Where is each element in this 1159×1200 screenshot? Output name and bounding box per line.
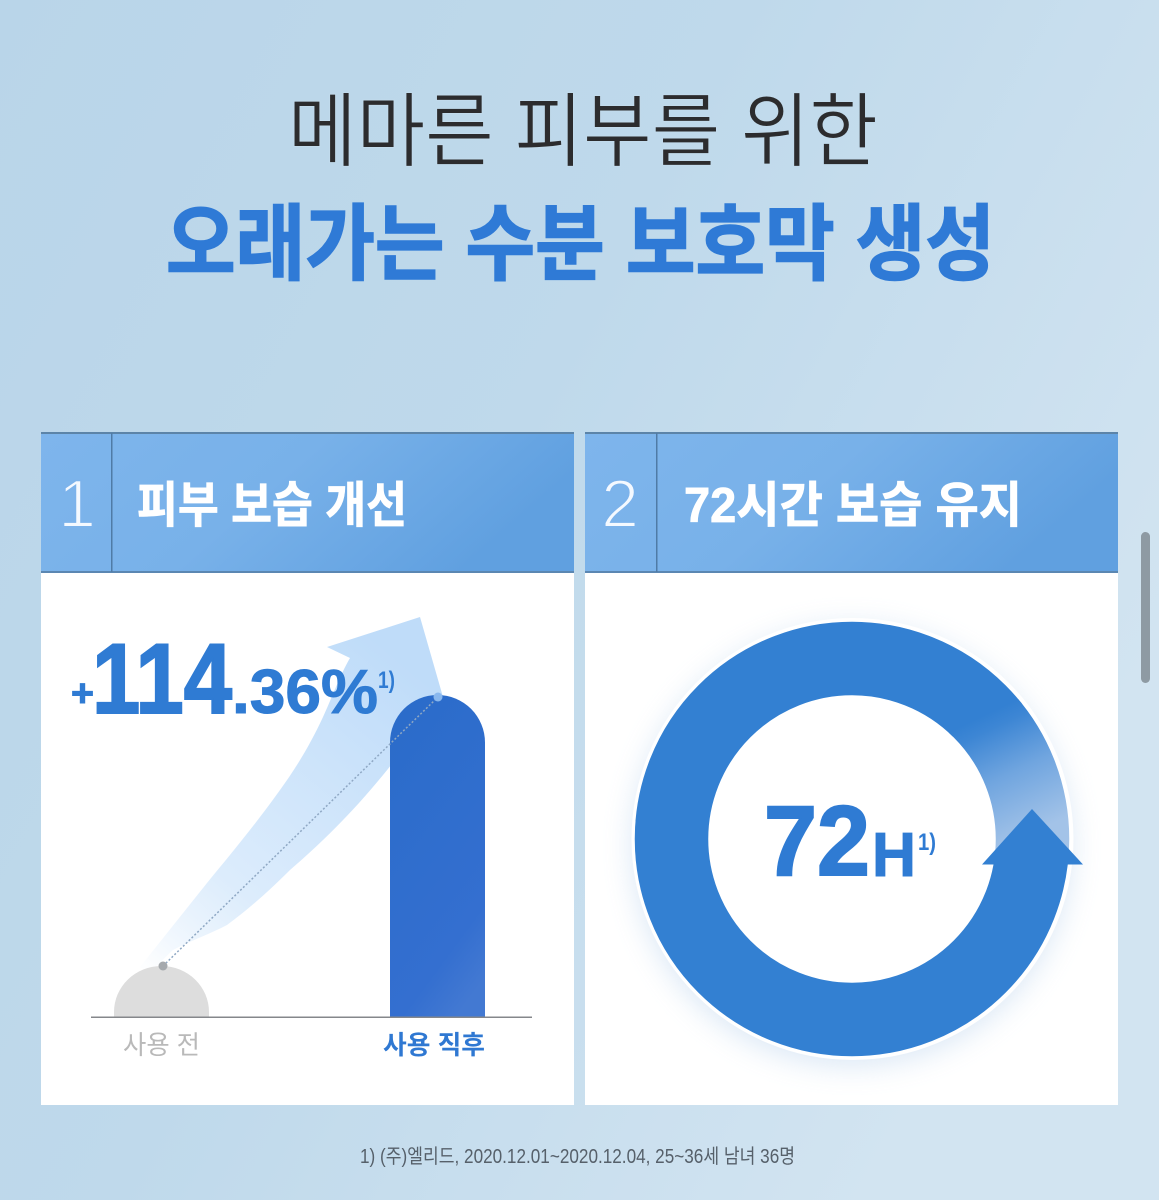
ring fade segment xyxy=(948,699,1070,850)
ring shadow xyxy=(632,626,1072,1066)
dotted trend line xyxy=(163,697,438,966)
ring label: 72H xyxy=(764,785,936,896)
panel header: 1 xyxy=(58,466,96,542)
panel body xyxy=(585,572,1118,1105)
stat: +114.36%: 1) xyxy=(378,667,395,694)
panel header: 2 xyxy=(601,466,639,542)
stat: +114.36%: .36% xyxy=(232,658,378,727)
ring label: 72H: H xyxy=(872,821,916,890)
trend end dot xyxy=(434,692,442,702)
stat: +114.36% xyxy=(71,623,395,734)
title: 메마른 피부를 위한 xyxy=(288,88,878,178)
after bar xyxy=(390,695,485,1017)
panel header: 피부 보습 개선 xyxy=(137,479,407,533)
swoosh arrow xyxy=(140,617,443,972)
trend start dot xyxy=(158,962,168,970)
title: 오래가는 수분 보호막 생성 xyxy=(166,198,995,291)
panel header xyxy=(41,432,574,573)
chart baseline xyxy=(91,1016,532,1018)
label: before use: 사용 전 xyxy=(123,1030,200,1060)
footnote: 1) (주)엘리드, 2020.12.01~2020.12.04, 25~36세 남녀 36명 xyxy=(360,1145,795,1168)
panel header: 72시간 보습 유지 xyxy=(684,479,1022,533)
ring halo xyxy=(632,618,1074,1060)
panel: 72 hour moisture retention xyxy=(585,432,1118,1105)
title xyxy=(166,88,995,291)
stat: +114.36%: + xyxy=(71,673,94,715)
before bar xyxy=(114,966,209,1017)
label: right after use: 사용 직후 xyxy=(383,1030,485,1060)
panel body xyxy=(41,572,574,1105)
stat: +114.36%: 114 xyxy=(92,623,232,734)
ring label: 72H: 1) xyxy=(918,829,936,856)
circular arrow ring xyxy=(672,658,1083,1020)
ring label: 72H: 72 xyxy=(764,785,870,896)
scrollbar xyxy=(1141,532,1150,683)
panel: skin moisture improvement xyxy=(41,432,574,1105)
arrow head xyxy=(982,809,1083,864)
panel header xyxy=(585,432,1118,573)
